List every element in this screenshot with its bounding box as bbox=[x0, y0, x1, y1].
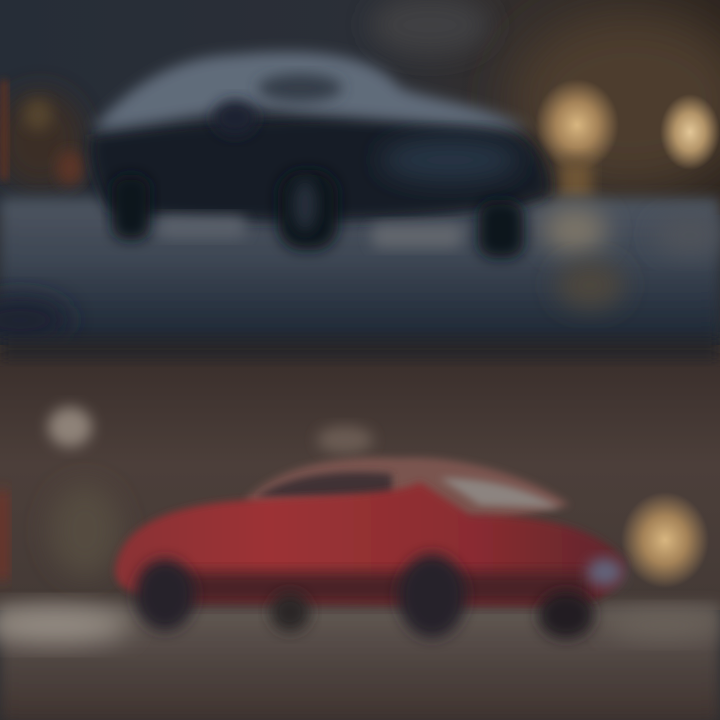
panel: top scene background bbox=[0, 0, 720, 215]
panel: top wet floor bbox=[0, 198, 720, 348]
floor reflections under car bbox=[158, 216, 246, 238]
car roof highlight bbox=[92, 52, 530, 130]
car lower shadow bbox=[150, 572, 590, 604]
car wheels bbox=[112, 175, 150, 240]
panel: bottom floor bbox=[0, 604, 720, 720]
car body bbox=[115, 482, 626, 605]
car roof bbox=[245, 457, 570, 520]
car window bbox=[258, 74, 342, 102]
car body bbox=[91, 116, 549, 222]
panel: bottom scene background bbox=[0, 338, 720, 610]
icon: red car bbox=[115, 457, 626, 639]
icon: dark navy car bbox=[91, 52, 549, 258]
car headlight bbox=[587, 558, 623, 586]
car wheels bbox=[135, 559, 195, 631]
car windows bbox=[255, 472, 392, 498]
car hood sheen bbox=[380, 138, 520, 182]
